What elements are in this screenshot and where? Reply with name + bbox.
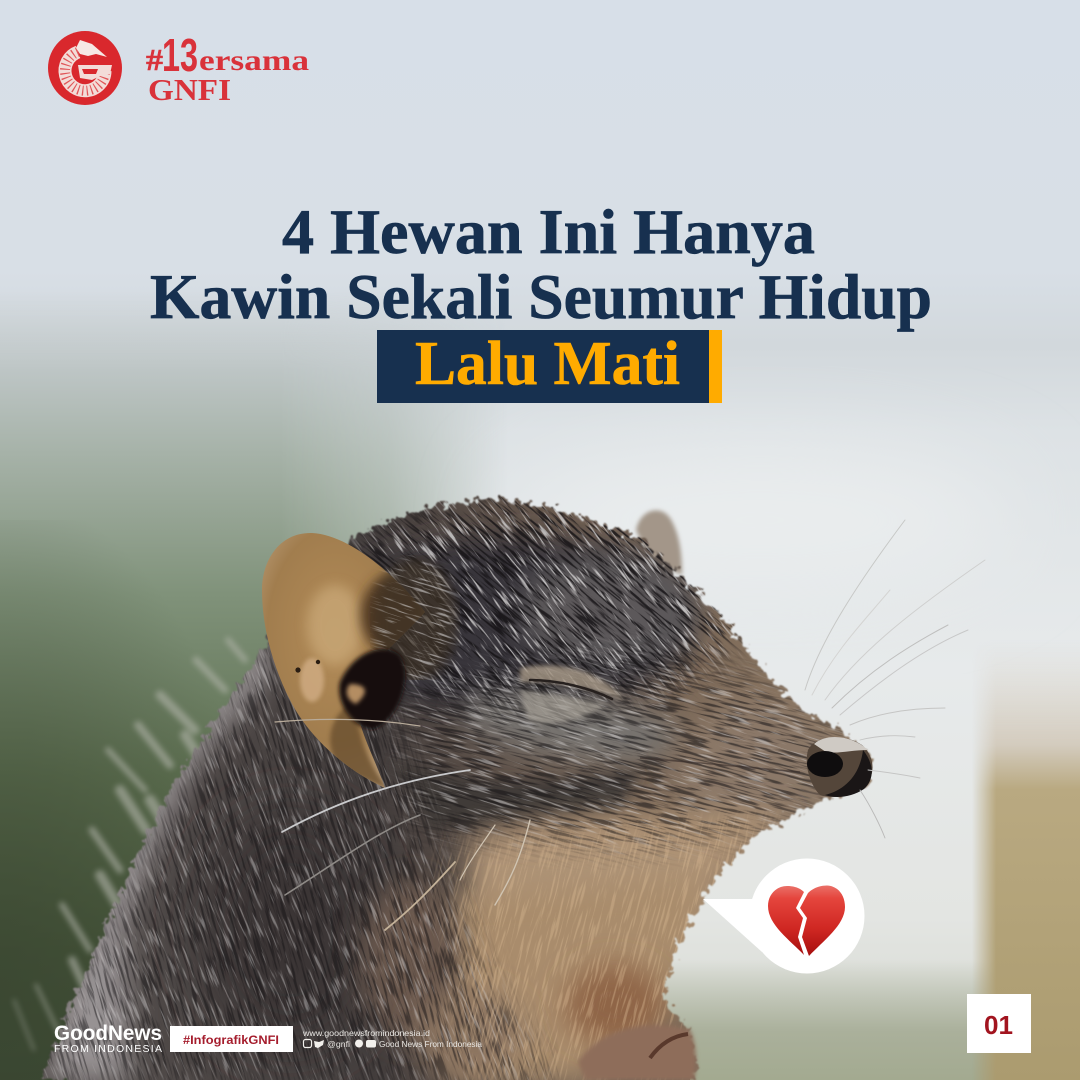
dark band below cheek [403, 766, 642, 830]
inner ear hollow [339, 649, 405, 730]
closed eye [520, 665, 625, 723]
dark head crown [330, 535, 690, 715]
footer contacts and social icons: www.goodnewsfromindonesia.id [302, 1028, 430, 1038]
title: 4 Hewan Ini Hanya [282, 196, 815, 267]
lower jaw [470, 810, 790, 960]
hashtag label: #InfografikGNFI [183, 1033, 279, 1047]
far ear [636, 510, 682, 575]
icon: broken heart [768, 886, 845, 956]
fur strands [349, 495, 744, 720]
animal body and head [0, 470, 985, 1080]
blurred fur along the animal's back [14, 640, 245, 1050]
logo text: #13ersama GNFI: ersama [199, 44, 309, 77]
logo text: #13ersama GNFI: 13 [162, 29, 198, 81]
chest orange [565, 965, 665, 1045]
page number: 01 [984, 1010, 1013, 1040]
footer: GoodNews from Indonesia [54, 1022, 162, 1055]
near ear [262, 533, 429, 790]
footer contacts and social icons: @gnfi [327, 1039, 350, 1049]
footer: GoodNews from Indonesia: GoodNews [54, 1022, 162, 1045]
footer: GoodNews from Indonesia: FROM INDONESIA [54, 1043, 162, 1055]
warm lower body [360, 880, 460, 1040]
hashtag label [170, 1026, 293, 1052]
speech bubble with broken heart [703, 858, 864, 974]
logo text: #13ersama GNFI: GNFI [148, 72, 231, 107]
logo text: #13ersama GNFI [146, 29, 309, 107]
muzzle [676, 701, 806, 807]
fur overlapping ear base [370, 555, 460, 680]
highlighted subtitle: Lalu Mati: Lalu Mati [415, 330, 680, 398]
whiskers [275, 520, 985, 930]
page number [967, 994, 1031, 1053]
footer contacts and social icons: Good News From Indonesia [379, 1039, 482, 1049]
lighter forehead [520, 550, 700, 670]
title: Kawin Sekali Seumur Hidup [150, 261, 932, 332]
nose [807, 737, 873, 797]
lower body dark [196, 817, 358, 1038]
paw [578, 1025, 696, 1080]
grey cheek [456, 676, 684, 774]
mouth line [640, 758, 800, 772]
logo: GNFI emblem [48, 31, 122, 105]
footer contacts and social icons [302, 1028, 482, 1049]
grey back edge [50, 640, 280, 1080]
background photo [0, 294, 1080, 1080]
title [150, 196, 932, 332]
throat [450, 880, 700, 1080]
logo text: #13ersama GNFI: # [146, 42, 164, 77]
